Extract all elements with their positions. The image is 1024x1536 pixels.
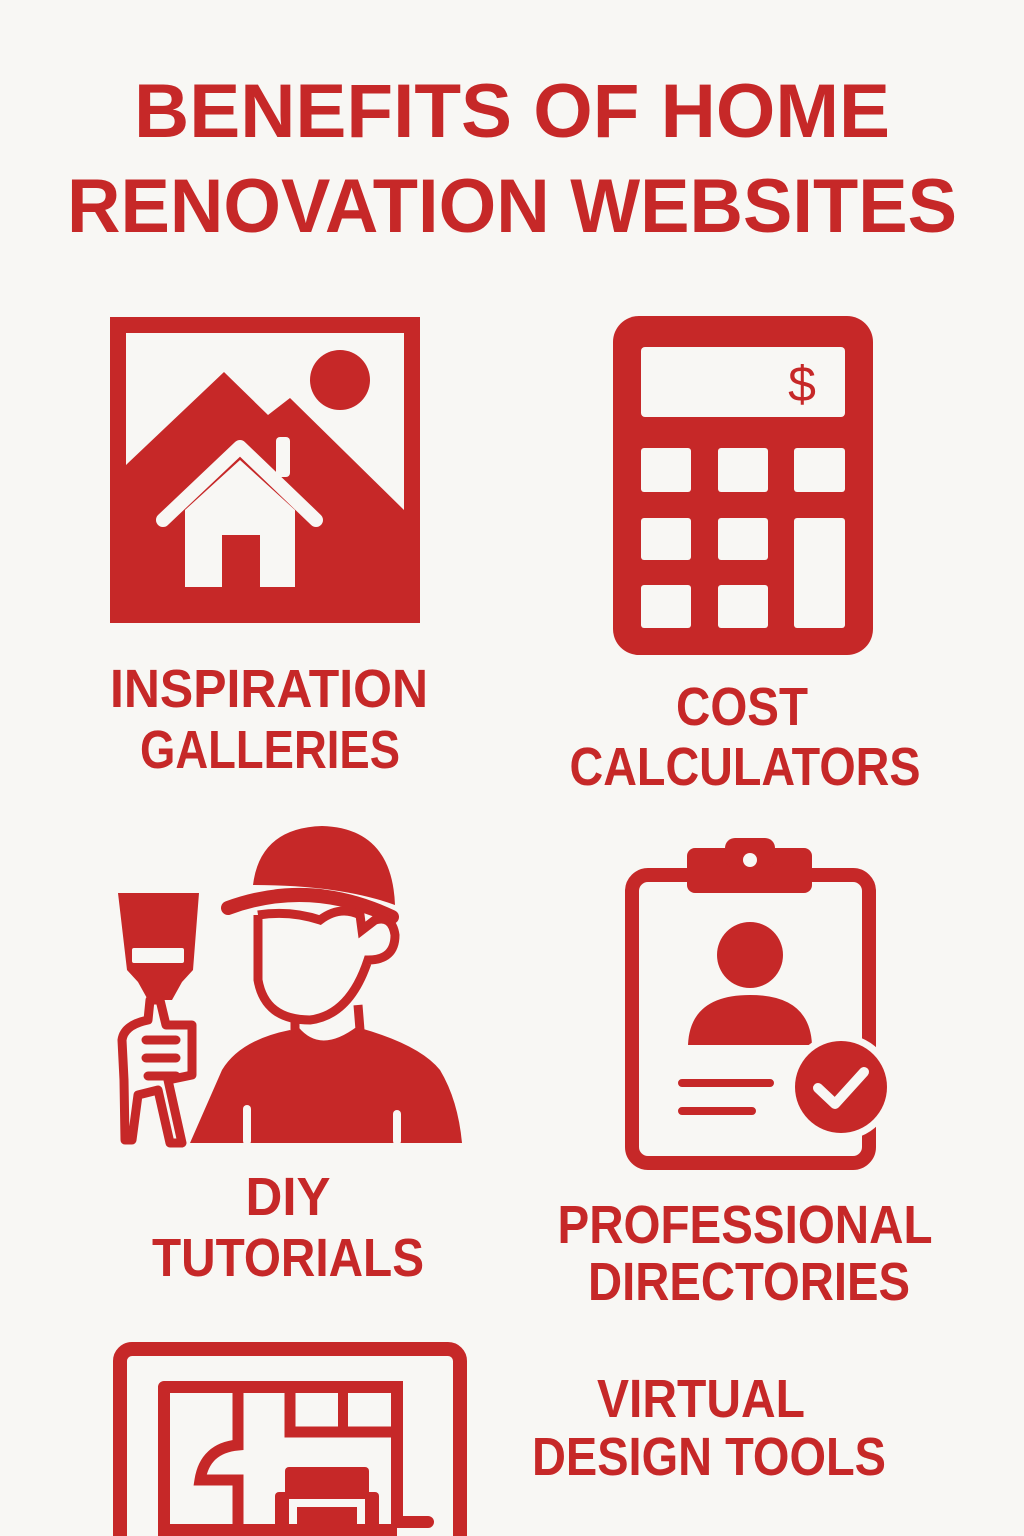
- label: DIY tutorials: DIY: [246, 1167, 330, 1227]
- label: cost calculators: [570, 677, 920, 797]
- label: DIY tutorials: [152, 1167, 424, 1288]
- label: inspiration galleries: GALLERIES: [140, 720, 400, 780]
- label: professional directories: [558, 1195, 932, 1312]
- icon: inspiration gallery picture: [118, 325, 412, 615]
- label: virtual design tools: [532, 1369, 886, 1487]
- label: professional directories: DIRECTORIES: [588, 1252, 910, 1312]
- icon: calculator: $: [788, 356, 816, 412]
- label: virtual design tools: DESIGN TOOLS: [532, 1427, 886, 1487]
- label: cost calculators: COST: [676, 677, 808, 737]
- label: inspiration galleries: INSPIRATION: [110, 659, 428, 719]
- label: professional directories: PROFESSIONAL: [558, 1195, 932, 1255]
- icon: virtual design floor plan: [120, 1349, 460, 1536]
- title: RENOVATION WEBSITES: [67, 164, 957, 249]
- label: cost calculators: CALCULATORS: [570, 737, 920, 797]
- title: [67, 69, 957, 249]
- icon: DIY worker with brush: [118, 826, 462, 1145]
- icon: calculator: [613, 316, 873, 655]
- label: inspiration galleries: [110, 659, 428, 780]
- title: BENEFITS OF HOME: [134, 69, 890, 154]
- label: virtual design tools: VIRTUAL: [597, 1369, 805, 1429]
- label: DIY tutorials: TUTORIALS: [152, 1228, 424, 1288]
- icon: clipboard professional directory: [632, 838, 894, 1163]
